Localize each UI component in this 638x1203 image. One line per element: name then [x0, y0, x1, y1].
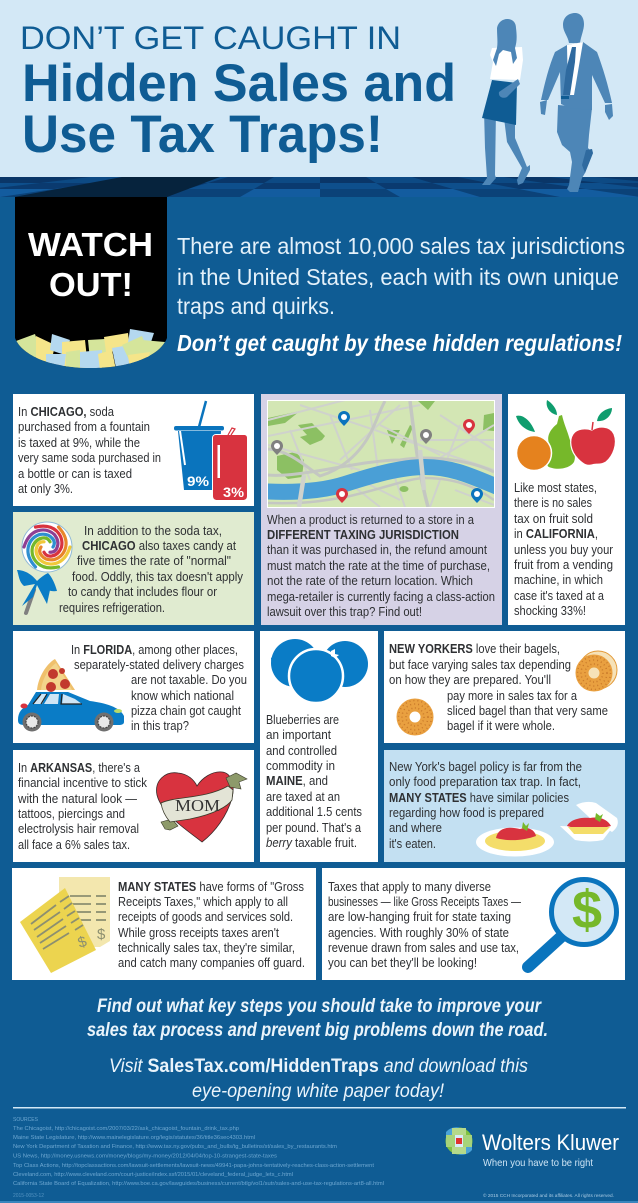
logo: wolters kluwer — [446, 1127, 619, 1169]
text: chicago candy: five times the rate of "normal" — [77, 554, 231, 568]
sources: New York Department of Taxation and Finance, http://www.tax.ny.gov/pubs_and_bulls/tg_bulletins/st/sales_by_restaurants.htm — [13, 1144, 337, 1150]
call to action — [87, 996, 548, 1102]
text: chicago candy: food. Oddly, this tax doesn't apply — [72, 570, 244, 584]
text: new yorkers bagels: NEW YORKERS love their bagels, — [389, 642, 560, 656]
text: chicago soda: is taxed at 9%, while the — [18, 436, 140, 450]
checkered floor — [0, 177, 638, 197]
text: gross receipts — [118, 880, 305, 970]
text: california fruit: case it's taxed at a — [514, 589, 604, 603]
text: low-hanging fruit — [328, 880, 521, 970]
text: gross receipts: While gross receipts taxes aren't — [118, 926, 279, 940]
icon: magnifying glass with dollar sign — [528, 880, 616, 967]
icon: spaghetti on a plate — [476, 822, 554, 856]
heading: watch out: OUT! — [49, 266, 133, 303]
text: new yorkers bagels: pay more in sales tax for a — [447, 689, 577, 703]
title — [20, 20, 456, 164]
text: new yorkers bagels: sliced bagel than that very same — [447, 704, 608, 718]
text: california fruit: tax on fruit sold — [514, 512, 593, 526]
map illustration — [258, 400, 505, 508]
title: Hidden Sales and — [22, 54, 456, 113]
figure: woman — [482, 19, 530, 185]
text: chicago soda — [18, 405, 161, 496]
copyright: © 2015 CCH Incorporated and its affiliates. All rights reserved. — [483, 1192, 614, 1199]
logo: wolters kluwer: When you have to be right — [483, 1157, 593, 1169]
text: florida pizza: are not taxable. Do you — [131, 673, 247, 687]
text: maine blueberries: commodity in — [266, 759, 335, 773]
text: gross receipts: Receipts Taxes," which apply to all — [118, 895, 288, 909]
text: chicago soda: at only 3%. — [18, 482, 73, 496]
text: gross receipts: MANY STATES have forms of "Gross — [118, 880, 304, 894]
text: chicago soda: In CHICAGO, soda — [18, 405, 114, 419]
text: california fruit: there is no sales — [514, 496, 592, 510]
text: california fruit: machine, in which — [514, 573, 603, 587]
text: different taxing jurisdiction: DIFFERENT TAXING JURISDICTION — [267, 528, 459, 542]
icon: receipts: $ — [97, 926, 106, 943]
icon: globe — [446, 1127, 472, 1155]
text: florida pizza: in this trap? — [131, 719, 189, 733]
text: food preparation — [389, 760, 582, 851]
text: different taxing jurisdiction: must match the rate at the time of purchase, — [267, 559, 490, 573]
text: maine blueberries: are taxed at an — [266, 790, 340, 804]
icon: mom heart tattoo — [157, 772, 247, 842]
text: maine blueberries: MAINE, and — [266, 774, 328, 788]
text: arkansas tattoo: financial incentive to stick — [18, 776, 148, 790]
intro text: There are almost 10,000 sales tax jurisdictions — [177, 233, 625, 259]
text: maine blueberries — [266, 713, 362, 850]
map pins — [271, 411, 483, 503]
icon: orange, pear and apple — [516, 400, 615, 470]
text: california fruit: Like most states, — [514, 481, 597, 495]
text: arkansas tattoo: tattoos, piercings and — [18, 807, 125, 821]
text: arkansas tattoo — [17, 761, 148, 852]
icon: sliced bagel — [578, 651, 617, 690]
text: food preparation: MANY STATES have similar policies — [389, 791, 569, 805]
intro text — [177, 233, 625, 356]
icon: blueberries — [271, 639, 368, 703]
text: low-hanging fruit: Taxes that apply to many diverse — [328, 880, 491, 894]
text: food preparation: it's eaten. — [389, 837, 436, 851]
text: chicago soda: a bottle or can is taxed — [18, 467, 132, 481]
icon: takeout box — [560, 802, 618, 842]
sources: Top Class Actions, http://topclassactions.com/lawsuit-settlements/lawsuit-news/49941-papa-johns-tentatively-reaches-class-action-settlement — [13, 1163, 374, 1169]
text: maine blueberries: additional 1.5 cents — [266, 805, 362, 819]
text: chicago candy: requires refrigeration. — [59, 601, 165, 615]
panel: florida pizza — [13, 631, 254, 743]
sources: Maine State Legislature, http://www.mainelegislature.org/legis/statutes/36/title36sec4303.html — [13, 1135, 255, 1141]
text: low-hanging fruit: businesses — like Gross Receipts Taxes — — [328, 895, 521, 909]
text: maine blueberries: Blueberries are — [266, 713, 339, 727]
text: low-hanging fruit: revenue drawn from sales and use tax, — [328, 941, 519, 955]
text: california fruit: fruit from a vending — [514, 558, 613, 572]
sources: SOURCES — [13, 1117, 38, 1123]
icon: pile of receipts — [16, 329, 165, 370]
text: california fruit: in CALIFORNIA, — [514, 527, 598, 541]
icon: mom heart tattoo: MOM — [175, 796, 220, 815]
text: chicago candy: to candy that includes flour or — [68, 585, 217, 599]
heading: watch out — [28, 226, 153, 303]
text: chicago candy: CHICAGO also taxes candy at — [82, 539, 236, 553]
panel: many states food preparation — [384, 750, 625, 862]
icon: receipts — [20, 877, 110, 973]
text: gross receipts: receipts of goods and services sold. — [118, 910, 293, 924]
sources — [13, 1117, 384, 1199]
text: california fruit: shocking 33%! — [514, 604, 586, 618]
text: arkansas tattoo: all face a 6% sales tax. — [18, 838, 130, 852]
logo: wolters kluwer: Wolters Kluwer — [482, 1130, 619, 1155]
text: food preparation: only food preparation tax trap. In fact, — [389, 775, 581, 789]
sources: The Chicagoist, http://chicagoist.com/2007/03/22/ask_chicagoist_fountain_drink_tax.php — [13, 1126, 239, 1132]
icon: pizza on a car — [18, 659, 124, 732]
text: california fruit — [514, 481, 613, 618]
panel: new yorkers bagels — [384, 631, 625, 743]
text: arkansas tattoo: In ARKANSAS, there's a — [18, 761, 140, 775]
heading: watch out: WATCH — [28, 226, 153, 263]
icon: receipts: $ — [76, 933, 90, 952]
text: arkansas tattoo: electrolysis hair removal — [18, 822, 139, 836]
text: different taxing jurisdiction: than it was purchased in, the refund amount — [267, 543, 487, 557]
intro text: traps and quirks. — [177, 293, 335, 319]
text: florida pizza: separately-stated delivery charges — [74, 658, 244, 672]
icon: magnifying glass with dollar sign: $ — [572, 880, 602, 940]
call to action: Find out what key steps you should take to improve your — [97, 996, 542, 1017]
icon: lollipop — [17, 519, 73, 613]
title: DON’T GET CAUGHT IN — [20, 20, 401, 56]
panel: california fruit — [508, 394, 625, 625]
sources: Cleveland.com, http://www.cleveland.com/court-justice/index.ssf/2015/01/cleveland_federal_judge_lets_c.html — [13, 1172, 293, 1178]
text: different taxing jurisdiction — [267, 513, 495, 619]
icon: soda cup and can — [174, 401, 248, 501]
text: arkansas tattoo: with the natural look — — [17, 792, 137, 806]
sources: US News, http://money.usnews.com/money/blogs/my-money/2012/04/04/top-10-strangest-state-taxes — [13, 1154, 277, 1160]
text: florida pizza — [71, 643, 247, 733]
text: low-hanging fruit: agencies. With roughly 30% of state — [328, 926, 509, 940]
panel: chicago soda — [13, 394, 254, 506]
text: maine blueberries: per pound. That's a — [266, 821, 361, 835]
text: different taxing jurisdiction: lawsuit over this trap? Find out! — [267, 605, 422, 619]
text: different taxing jurisdiction: not the rate of the return location. Which — [267, 574, 473, 588]
call to action: eye-opening white paper today! — [192, 1081, 445, 1102]
icon: whole bagel — [398, 700, 432, 734]
panel: maine blueberries — [260, 631, 378, 862]
text: chicago soda: purchased from a fountain — [18, 420, 150, 434]
text: gross receipts: and catch many companies off guard. — [118, 956, 305, 970]
text: food preparation: regarding how food is prepared — [389, 806, 544, 820]
text: florida pizza: pizza chain got caught — [131, 704, 241, 718]
text: florida pizza: know which national — [131, 689, 234, 703]
text: chicago soda: very same soda purchased in — [18, 451, 161, 465]
text: new yorkers bagels: bagel if it were whole. — [447, 719, 555, 733]
panel: gross receipts — [12, 868, 316, 980]
panel: different taxing jurisdiction — [258, 394, 505, 625]
text: maine blueberries: an important — [266, 728, 331, 742]
text: chicago candy: In addition to the soda tax, — [84, 524, 222, 538]
text: maine blueberries: berry taxable fruit. — [266, 836, 357, 850]
text: low-hanging fruit: are low-hanging fruit for state taxing — [328, 910, 511, 924]
text: gross receipts: technically sales tax, they're similar, — [118, 941, 295, 955]
sources: California State Board of Equalization, http://www.boe.ca.gov/lawguides/business/current/btlg/vol1/sutr/sales-and-use-tax-regulations-art8-all.html — [13, 1181, 384, 1187]
intro text: in the United States, each with its own unique — [177, 264, 619, 290]
text: chicago candy — [59, 524, 244, 615]
call to action: sales tax process and prevent big problems down the road. — [87, 1020, 548, 1041]
text: florida pizza: In FLORIDA, among other places, — [71, 643, 238, 657]
header band — [0, 0, 638, 177]
figure: man — [540, 13, 613, 192]
panel: low-hanging fruit — [322, 868, 625, 980]
text: california fruit: unless you buy your — [514, 543, 613, 557]
title: Use Tax Traps! — [22, 105, 383, 164]
text: food preparation: and where — [389, 821, 442, 835]
panel: watch out — [15, 197, 167, 370]
text: new yorkers bagels: on how they are prepared. You'll — [389, 673, 551, 687]
shadow of the panel — [14, 177, 220, 197]
panel: chicago candy — [13, 512, 254, 625]
text: food preparation: New York's bagel policy is far from the — [389, 760, 582, 774]
icon: soda cup and can: 9% — [187, 473, 210, 489]
text: new yorkers bagels: but face varying sales tax depending — [389, 658, 571, 672]
text: low-hanging fruit: you can bet they'll be looking! — [328, 956, 477, 970]
sources: 2015-0053-12 — [13, 1193, 44, 1199]
text: maine blueberries: and controlled — [266, 744, 337, 758]
text: different taxing jurisdiction: mega-retailer is currently facing a class-action — [267, 590, 495, 604]
call to action: Visit SalesTax.com/HiddenTraps and download this — [109, 1056, 528, 1077]
text: different taxing jurisdiction: When a product is returned to a store in a — [267, 513, 474, 527]
text: new yorkers bagels — [389, 642, 608, 733]
icon: soda cup and can: 3% — [223, 484, 245, 500]
panel: arkansas tattoo — [13, 750, 254, 862]
